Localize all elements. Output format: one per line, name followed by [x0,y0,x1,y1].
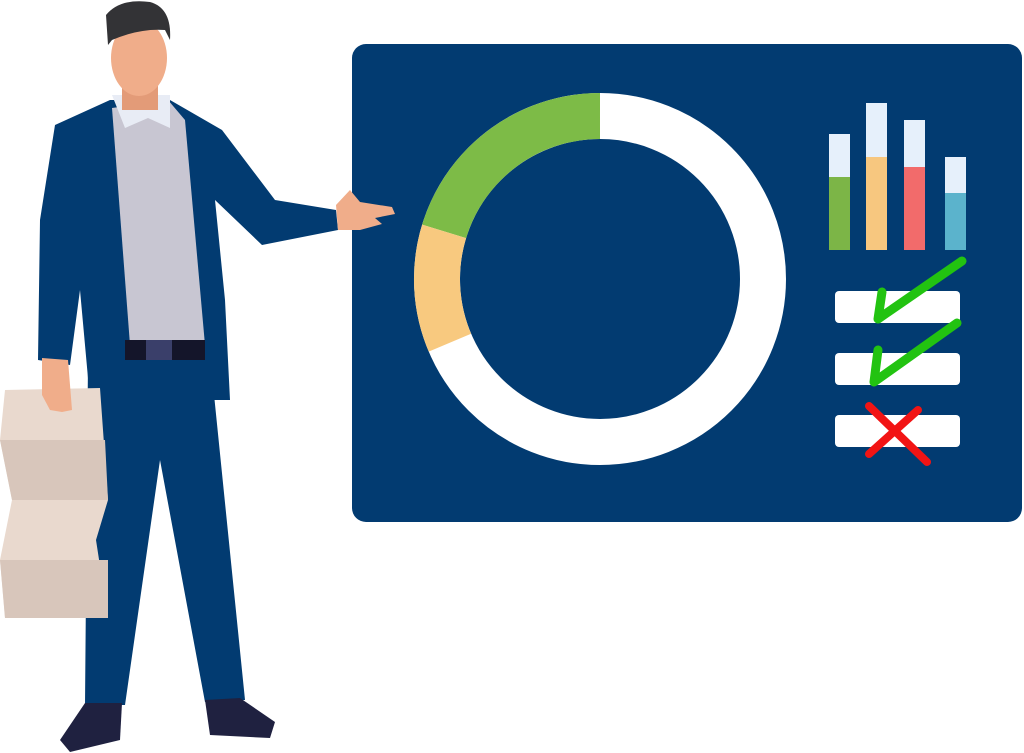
shirt [112,100,205,345]
bar chart [829,103,966,250]
hand: pointing [336,190,395,230]
papers [0,388,108,618]
hair [106,1,170,45]
shoes [60,703,122,752]
face [111,20,167,96]
donut chart [437,116,763,442]
collar [112,95,170,128]
icon: check 2 [874,323,957,382]
pants [85,355,245,705]
panel: dashboard board [352,44,1022,522]
icon: red cross [869,406,927,462]
neck [122,80,158,110]
hand: holding papers [42,358,72,412]
icon: check 1 [878,261,962,319]
presenter figure [0,1,395,752]
checklist [835,261,962,462]
belt [125,340,205,360]
jacket [38,100,338,400]
